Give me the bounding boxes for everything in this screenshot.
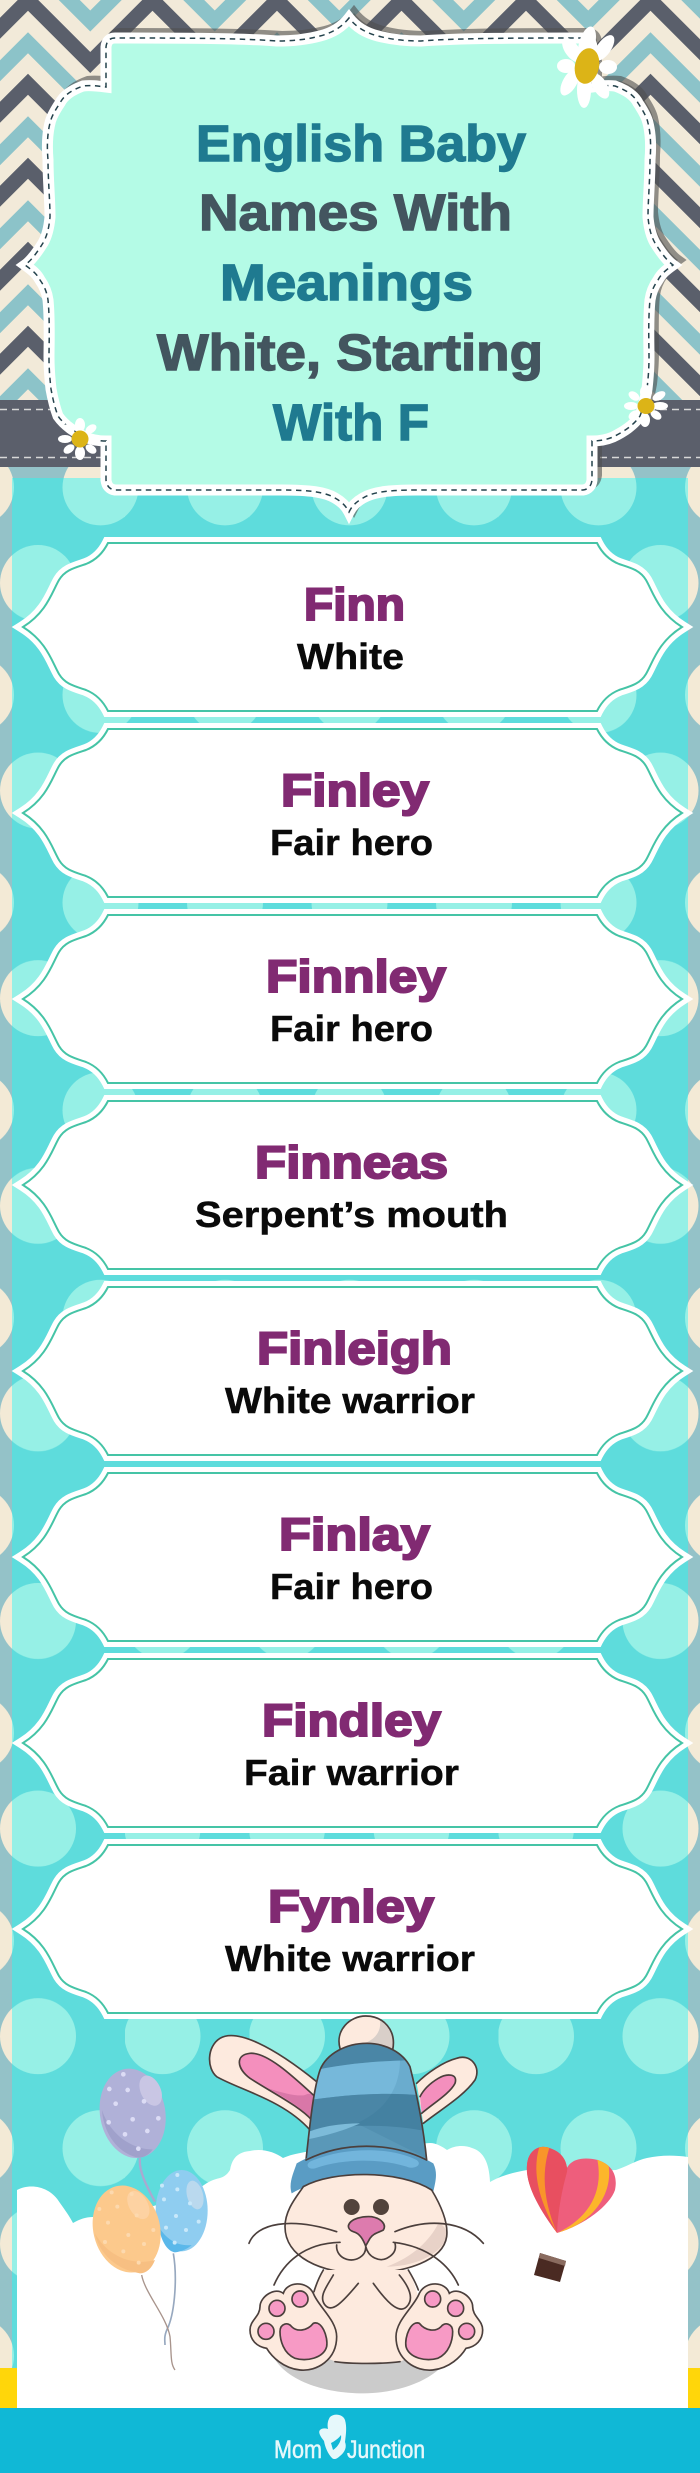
card: Finneas: Serpent’s mouth [195, 1194, 508, 1235]
card: Finleigh [23, 1287, 682, 1455]
card: Finlay: Fair hero [270, 1566, 433, 1607]
card: Finn [23, 543, 682, 711]
card: Finnley [23, 915, 682, 1083]
title text: Meanings [220, 254, 473, 311]
hat [305, 2042, 428, 2160]
card: Finnley: Fair hero [270, 1008, 433, 1049]
card: Fynley [23, 1845, 682, 2013]
left ear [210, 2036, 317, 2130]
card: Finn: White [297, 636, 404, 677]
card: Finlay: Finlay [279, 1509, 430, 1560]
title text: With F [273, 394, 429, 451]
eyes [344, 2199, 389, 2215]
title text: English Baby [196, 115, 527, 172]
card: Finley: Finley [281, 765, 429, 816]
title panel [25, 13, 678, 512]
white clouds [17, 2143, 688, 2408]
title text: Names With [199, 184, 512, 241]
icon: small daisy left [58, 418, 101, 460]
chevron header background [0, 0, 700, 400]
card: Finnley: Finnley [266, 951, 446, 1002]
title text: White, Starting [157, 324, 543, 381]
card: Findley: Fair warrior [244, 1752, 459, 1793]
card: Finleigh: Finleigh [257, 1323, 452, 1374]
orange balloon [84, 2178, 175, 2370]
card: Fynley: White warrior [225, 1938, 475, 1979]
icon: heart hot-air balloon [524, 2140, 616, 2282]
purple balloon [93, 2063, 173, 2163]
logo icon [319, 2415, 346, 2459]
icon: large daisy top right [556, 25, 618, 108]
card: Findley [23, 1659, 682, 1827]
head [285, 2175, 447, 2273]
hat brim [291, 2146, 436, 2193]
whiskers [249, 2223, 483, 2285]
right foot [396, 2284, 483, 2370]
card: Finleigh: White warrior [225, 1380, 475, 1421]
left foot [250, 2284, 337, 2370]
card: Fynley: Fynley [268, 1881, 434, 1932]
logo: MomJunction: Mom [274, 2436, 322, 2464]
right ear [417, 2057, 477, 2123]
nose [348, 2217, 384, 2246]
icon: bunny wearing a blue hat [210, 2016, 483, 2393]
logo: MomJunction: Junction [347, 2436, 425, 2464]
dark ribbon band [0, 400, 700, 467]
basket [534, 2253, 566, 2282]
card: Finneas [23, 1101, 682, 1269]
teal polka dot background [12, 478, 688, 2408]
pompom [339, 2016, 393, 2050]
card: Finley: Fair hero [270, 822, 433, 863]
logo: MomJunction [274, 2415, 425, 2464]
card: Finlay [23, 1473, 682, 1641]
side frame with cream dots [0, 467, 700, 2408]
card: Finneas: Finneas [255, 1137, 448, 1188]
card: Finley [23, 729, 682, 897]
title text [157, 115, 543, 451]
yellow corner strips [0, 2368, 700, 2408]
icon: small daisy right [624, 385, 668, 427]
card: Finn: Finn [304, 579, 405, 630]
shadow [272, 2353, 448, 2393]
icon: balloons [84, 2063, 208, 2370]
blue balloon [156, 2170, 208, 2345]
mouth [337, 2243, 395, 2260]
card: Findley: Findley [262, 1695, 441, 1746]
footer bar [0, 2408, 700, 2473]
body [309, 2270, 421, 2363]
